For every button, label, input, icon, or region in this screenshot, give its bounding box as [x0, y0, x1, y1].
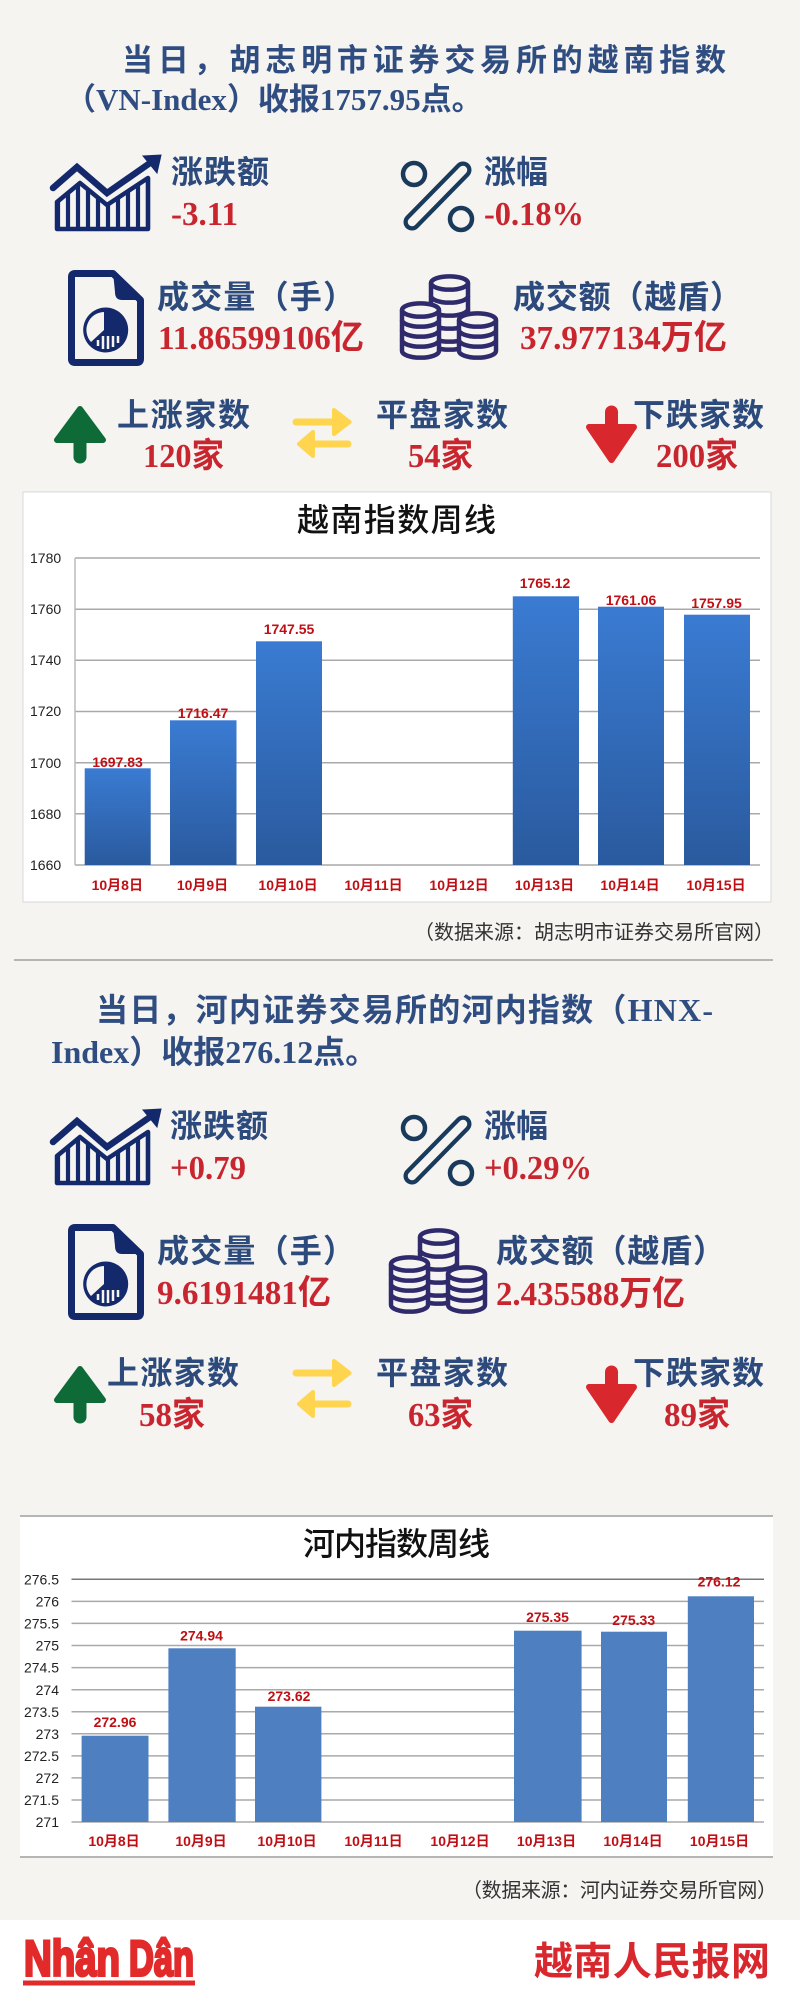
icon: percent — [403, 1117, 472, 1184]
x axis date labels: 10月11日 — [344, 877, 403, 893]
value: volume: 9.6191481亿 — [157, 1274, 331, 1312]
bar value labels: 272.96 — [94, 1714, 137, 1730]
y axis labels: 1680 — [30, 806, 61, 822]
source note: Ho Chi Minh exchange: （数据来源：胡志明市证券交易所官网） — [414, 916, 774, 945]
icon: file with pie chart — [72, 1226, 143, 1316]
bar value labels: 1747.55 — [264, 621, 315, 637]
y axis labels: 1700 — [30, 755, 61, 771]
label: change percent: 涨幅 — [484, 1101, 548, 1147]
label: change amount: 涨跌额 — [170, 1101, 268, 1147]
bar value labels: 274.94 — [180, 1628, 223, 1644]
y axis labels: 276.5 — [24, 1572, 59, 1588]
x axis date labels: 10月8日 — [92, 877, 143, 893]
chart title: 河内指数周线 — [303, 1519, 490, 1565]
y axis labels: 1720 — [30, 703, 61, 719]
y axis labels: 273.5 — [24, 1704, 59, 1720]
label: volume: 成交量（手） — [157, 1226, 355, 1272]
panel: VN-Index weekly bar chart — [23, 492, 771, 902]
x axis date labels: 10月13日 — [515, 877, 574, 893]
panel: HNX-Index weekly bar chart — [20, 1516, 773, 1857]
y axis labels: 275 — [36, 1638, 59, 1654]
section: VN-Index summary — [53, 43, 764, 475]
y axis labels: 274.5 — [24, 1660, 59, 1676]
label: turnover: 成交额（越盾） — [513, 272, 742, 318]
title: VN-Index close: （VN-Index）收报1757.95点。 — [65, 82, 483, 117]
value: unchanged: 54家 — [408, 437, 473, 475]
chart title: 越南指数周线 — [297, 495, 496, 541]
icon: file with pie chart — [72, 272, 143, 362]
icon: green up arrow — [57, 409, 103, 457]
icon: percent — [403, 163, 472, 230]
value: turnover: 2.435588万亿 — [496, 1275, 685, 1313]
y axis labels: 1780 — [30, 550, 61, 566]
x axis date labels: 10月11日 — [344, 1833, 403, 1849]
x axis date labels — [88, 1833, 749, 1849]
bar value labels: 1761.06 — [606, 592, 657, 608]
value: change amount: -3.11 — [171, 196, 238, 233]
value: change percent: -0.18% — [484, 196, 584, 233]
section: HNX-Index summary — [51, 992, 764, 1434]
x axis date labels — [92, 877, 746, 893]
x axis date labels: 10月15日 — [690, 1833, 749, 1849]
bars — [82, 1596, 754, 1822]
x axis date labels: 10月9日 — [175, 1833, 227, 1849]
title: VN-Index close — [65, 43, 726, 117]
grid lines — [72, 1579, 764, 1822]
x axis date labels: 10月14日 — [603, 1833, 663, 1849]
value: change percent: +0.29% — [484, 1150, 592, 1187]
value: change amount: +0.79 — [170, 1150, 246, 1187]
bar value labels: 1765.12 — [520, 575, 571, 591]
x axis date labels: 10月10日 — [257, 1833, 317, 1849]
footer band — [0, 1920, 800, 2000]
icon: red down arrow — [589, 412, 634, 460]
value: advancers: 120家 — [143, 437, 224, 475]
bar value labels: 1757.95 — [691, 595, 742, 611]
label: change percent: 涨幅 — [484, 147, 548, 193]
x axis date labels: 10月12日 — [430, 1833, 490, 1849]
y axis labels: 272.5 — [24, 1748, 59, 1764]
label: turnover: 成交额（越盾） — [496, 1226, 725, 1272]
label: decliners: 下跌家数 — [633, 1348, 764, 1394]
bar value labels: 276.12 — [698, 1574, 741, 1590]
icon: coin stacks — [402, 276, 496, 358]
x axis date labels: 10月14日 — [600, 877, 660, 893]
value: advancers: 58家 — [139, 1396, 205, 1434]
y axis labels: 274 — [36, 1682, 59, 1698]
y axis labels: 273 — [36, 1726, 59, 1742]
title: VN-Index close: 当日，胡志明市证券交易所的越南指数 — [122, 43, 726, 78]
title: HNX-Index close — [51, 992, 713, 1070]
icon: yellow swap arrows — [296, 1361, 350, 1416]
y axis labels: 1660 — [30, 857, 61, 873]
y axis labels — [30, 550, 61, 873]
bar value labels: 273.62 — [268, 1688, 311, 1704]
icon: yellow swap arrows — [296, 410, 350, 456]
text: site name: 越南人民报网 — [534, 1931, 770, 1987]
label: decliners: 下跌家数 — [633, 390, 764, 436]
bar value labels: 275.35 — [526, 1609, 569, 1625]
bar value labels: 1697.83 — [92, 754, 143, 770]
icon: red down arrow — [589, 1372, 634, 1420]
title: HNX-Index close: 当日，河内证券交易所的河内指数（HNX- — [96, 992, 713, 1028]
icon: coin stacks — [391, 1230, 485, 1312]
label: unchanged: 平盘家数 — [376, 390, 508, 436]
value: volume: 11.86599106亿 — [158, 319, 364, 357]
label: advancers: 上涨家数 — [117, 390, 250, 436]
x axis date labels: 10月9日 — [177, 877, 228, 893]
label: unchanged: 平盘家数 — [376, 1348, 508, 1394]
grid lines — [75, 558, 760, 865]
bar value labels: 275.33 — [612, 1612, 655, 1628]
icon: green up arrow — [57, 1369, 103, 1417]
x axis date labels: 10月8日 — [88, 1833, 140, 1849]
bars — [85, 596, 750, 865]
bar value labels — [94, 1574, 741, 1730]
value: decliners: 200家 — [656, 437, 738, 475]
logo: Nhan Dan: Nhân — [24, 1930, 120, 1986]
bar value labels — [92, 575, 742, 770]
x axis date labels: 10月12日 — [429, 877, 489, 893]
label: change amount: 涨跌额 — [171, 147, 269, 193]
value: unchanged: 63家 — [408, 1396, 473, 1434]
source note: Hanoi exchange: （数据来源：河内证券交易所官网） — [462, 1874, 777, 1903]
icon: line and bar chart — [53, 1109, 161, 1183]
value: decliners: 89家 — [664, 1396, 730, 1434]
title: HNX-Index close: Index）收报276.12点。 — [51, 1034, 377, 1070]
y axis labels: 276 — [36, 1594, 59, 1610]
label: volume: 成交量（手） — [157, 272, 355, 318]
x axis date labels: 10月15日 — [686, 877, 746, 893]
label: advancers: 上涨家数 — [107, 1348, 239, 1394]
y axis labels: 1760 — [30, 601, 61, 617]
x axis date labels: 10月13日 — [517, 1833, 576, 1849]
value: turnover: 37.977134万亿 — [520, 319, 727, 357]
y axis labels: 275.5 — [24, 1616, 59, 1632]
y axis labels: 1740 — [30, 652, 61, 668]
y axis labels: 271.5 — [24, 1792, 59, 1808]
bar value labels: 1716.47 — [178, 705, 229, 721]
logo: Nhan Dan: Dân — [129, 1930, 194, 1986]
icon: line and bar chart — [53, 155, 161, 229]
x axis date labels: 10月10日 — [258, 877, 318, 893]
y axis labels: 272 — [36, 1770, 59, 1786]
y axis labels — [24, 1572, 59, 1830]
y axis labels: 271 — [36, 1814, 59, 1830]
